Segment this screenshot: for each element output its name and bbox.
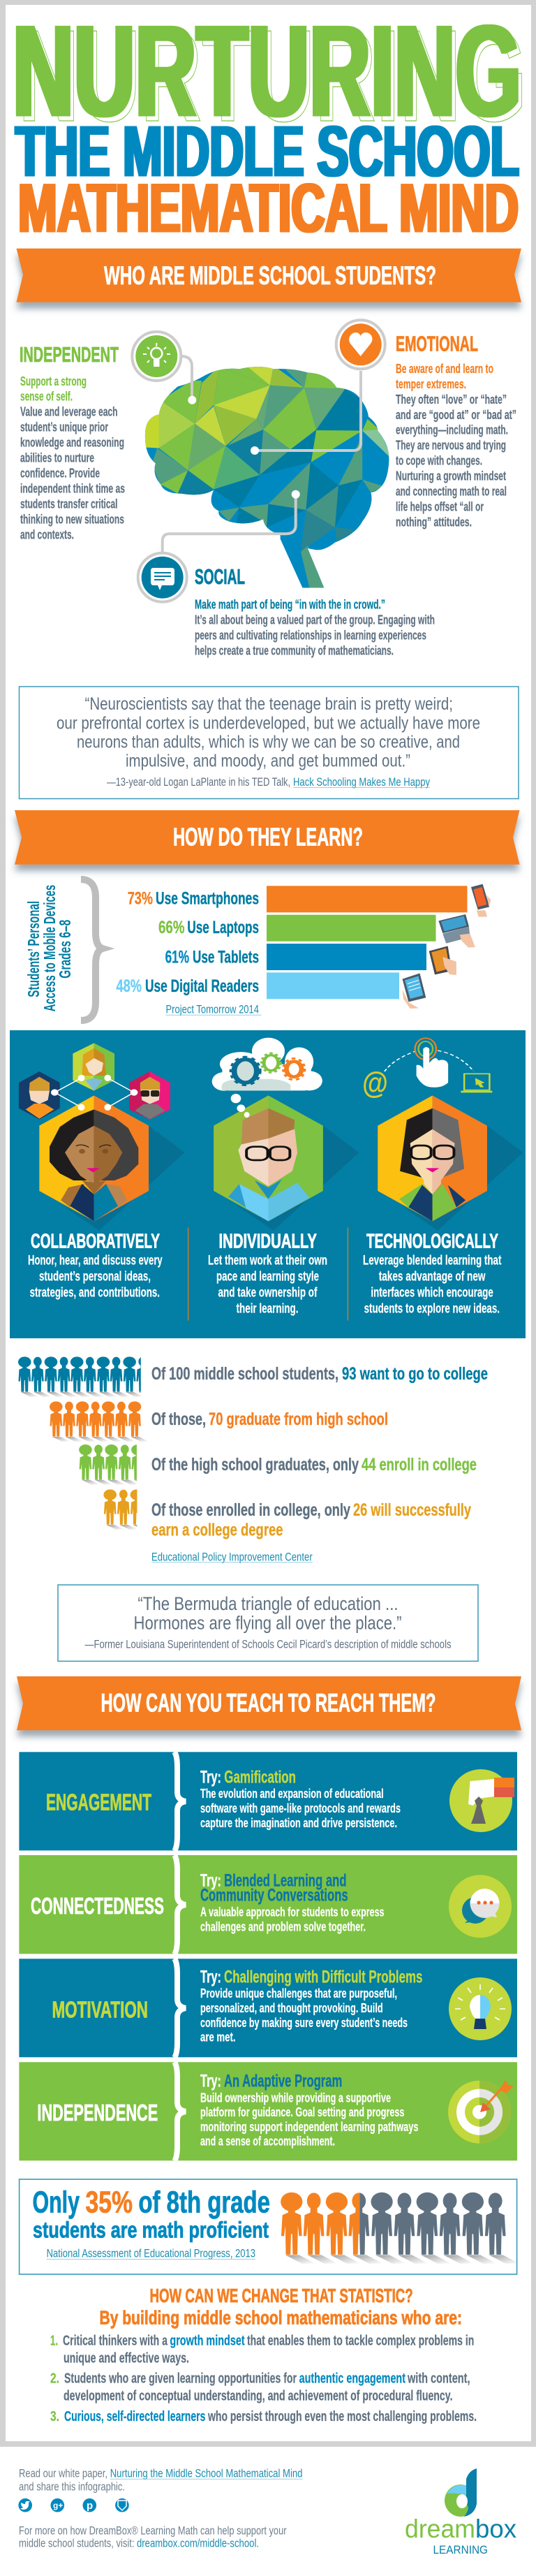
icon: digital reader: [402, 973, 426, 1009]
heading: how can we change that statistic: [99, 2285, 462, 2329]
text block: emotional: to cope with changes.: [396, 453, 482, 468]
rotated label: students personal access: Grades 6–8: [56, 920, 74, 979]
text block: independent: and contexts.: [20, 527, 74, 541]
connector: social: [163, 495, 296, 552]
card: connectedness: Try:: [200, 1871, 221, 1891]
list item 2: 2.: [50, 2371, 59, 2387]
stat line: 26 earn degree: 26 will successfully: [353, 1500, 471, 1520]
card: connectedness: [19, 1855, 517, 1954]
text block: independent: knowledge and reasoning: [20, 435, 124, 450]
rotated label: students personal access: Students’ Personal: [24, 901, 43, 997]
card: connectedness: Community Conversations: [200, 1886, 348, 1905]
rotated label: students personal access: Access to Mobile Devices: [40, 885, 59, 1011]
list item 2: Students who are given learning opportunities for: [64, 2371, 297, 2387]
icon: pinterest: [82, 2498, 96, 2512]
list item 1: 1.: [50, 2334, 58, 2349]
column: collaboratively: COLLABORATIVELY: [31, 1231, 160, 1253]
card: motivation: Challenging with Difficult Problems: [224, 1967, 422, 1986]
card: engagement: Gamification: [224, 1767, 296, 1787]
card: engagement: Try:: [200, 1767, 221, 1787]
card: independence: monitoring support independent learning pathways: [200, 2119, 419, 2134]
card: connectedness: A valuable approach for students to express: [200, 1904, 384, 1919]
footer: white paper text: [19, 2468, 303, 2494]
stat line: 70 graduate: [151, 1410, 388, 1429]
card: engagement: software with game-like protocols and rewards: [200, 1801, 401, 1815]
icon: thought cloud with gears: [212, 1038, 322, 1118]
bar: laptops: Use Laptops: [187, 918, 259, 937]
pictogram row: 44: [79, 1444, 137, 1485]
list item 1: Critical thinkers with a: [63, 2334, 168, 2349]
callout: neuroscientists quote: [20, 687, 519, 799]
list item 1: [50, 2334, 474, 2366]
card: motivation: Try:: [200, 1967, 221, 1986]
heading: how can we change that statistic: HOW CAN WE CHANGE THAT STATISTIC?: [149, 2285, 413, 2306]
column: collaboratively: Honor, hear, and discuss every: [28, 1253, 163, 1268]
connector dots: [188, 396, 300, 499]
connector: emotional: [255, 371, 361, 451]
callout: neuroscientists quote: impulsive, and moody, and get bummed out.”: [126, 751, 410, 770]
connector: independent: [181, 356, 192, 400]
portrait: technological student: [378, 1095, 487, 1221]
text block: independent: student’s unique prior: [20, 420, 108, 434]
list item 3: 3.: [50, 2409, 59, 2424]
logo wordmark: dream: [405, 2515, 475, 2543]
stat line: 70 graduate: Of those,: [151, 1410, 206, 1429]
text block: independent: sense of self.: [20, 389, 73, 404]
bar: digital readers: [116, 972, 399, 999]
pictogram row: 70: [50, 1401, 149, 1442]
bar: smartphones: [128, 886, 467, 912]
stat line: 93 want college: Of 100 middle school students,: [151, 1364, 338, 1384]
portrait: collaborative student: [39, 1095, 149, 1221]
bar: digital readers: Use Digital Readers: [145, 976, 259, 996]
bar chart: device access: [116, 886, 468, 999]
text block: emotional: nothing” attitudes.: [396, 514, 472, 529]
icon: twitter: [18, 2498, 32, 2512]
card: connectedness: CONNECTEDNESS: [31, 1893, 164, 1919]
column: technologically: [363, 1231, 502, 1316]
card: independence: platform for guidance. Goal setting and progress: [200, 2105, 404, 2119]
panel: 35 percent proficient: Only: [32, 2186, 80, 2220]
text block: social: [195, 597, 435, 657]
icon: pinterest: p: [87, 2500, 93, 2512]
list item 2: with content,: [407, 2371, 470, 2387]
icon: google plus: g+: [53, 2501, 63, 2510]
card: connectedness: challenges and problem solve together.: [200, 1919, 366, 1933]
column: collaboratively: [28, 1231, 163, 1300]
icon: chess move: [449, 1769, 514, 1832]
stat line: 93 want college: 93 want to go to college: [342, 1364, 488, 1384]
bar: laptops: [158, 915, 436, 942]
icon: shield: [115, 2498, 129, 2512]
card: engagement: [19, 1752, 517, 1851]
bar: smartphones: 73%: [128, 888, 153, 908]
callout: bermuda triangle quote: Hormones are flying all over the place.”: [134, 1612, 402, 1633]
stat line: 26 earn degree: Of those enrolled in college, only: [151, 1500, 350, 1520]
text block: independent: confidence. Provide: [20, 466, 100, 481]
bar: tablets: 61%: [165, 947, 189, 967]
card: engagement: ENGAGEMENT: [46, 1790, 151, 1815]
icon: at sign: @: [362, 1066, 388, 1100]
banner: how do they learn: [15, 810, 519, 865]
card: motivation: confidence by making sure every student’s needs: [200, 2015, 408, 2030]
footer: white paper text: Read our white paper,: [19, 2468, 107, 2480]
card: motivation: [19, 1959, 517, 2058]
icon: light bulb: [132, 332, 181, 381]
panel: 35 percent proficient: students are math proficient: [33, 2217, 269, 2242]
stat line: 70 graduate: 70 graduate from high school: [209, 1410, 388, 1429]
pictogram row: 26: [103, 1489, 137, 1530]
text block: independent: abilities to nurture: [20, 451, 94, 465]
banner: who are middle school students: [17, 249, 521, 302]
source: educational policy improvement center: Educational Policy Improvement Center: [151, 1551, 313, 1563]
list item 3: [50, 2409, 477, 2424]
brain illustration: [137, 363, 396, 592]
callout: bermuda triangle quote: “The Bermuda triangle of education ...: [137, 1593, 399, 1614]
icons: devices: [402, 884, 491, 1009]
footer: more information text: [19, 2524, 287, 2550]
logo mark: [445, 2468, 477, 2517]
heading: social: SOCIAL: [195, 565, 245, 589]
list item 2: authentic engagement: [299, 2371, 405, 2387]
card: independence: An Adaptive Program: [224, 2072, 342, 2091]
panel: 35 percent proficient: [20, 2179, 519, 2274]
bar: digital readers: 48%: [116, 976, 142, 996]
callout: neuroscientists quote: —13-year-old Logan LaPlante in his TED Talk,: [107, 776, 290, 789]
icon: tablet: [429, 946, 456, 975]
text block: emotional: temper extremes.: [396, 376, 466, 391]
text block: independent: Support a strong: [20, 374, 87, 388]
logo: dreambox learning: box: [475, 2515, 516, 2543]
portrait: individual student: [214, 1095, 323, 1221]
text block: emotional: life helps offset “all or: [396, 499, 484, 513]
panel: 35 percent proficient: 35%: [85, 2186, 133, 2220]
footer: more information text: dreambox.com/middle-school.: [137, 2538, 259, 2550]
card: engagement: capture the imagination and drive persistence.: [200, 1815, 397, 1830]
column: individually: INDIVIDUALLY: [219, 1231, 317, 1253]
connector network: [51, 1075, 137, 1111]
column: technologically: takes advantage of new: [379, 1268, 486, 1284]
icon: bright bulb: [449, 1977, 512, 2040]
heading: emotional: EMOTIONAL: [396, 332, 478, 356]
callout: bermuda triangle quote: —Former Louisiana Superintendent of Schools Cecil Picard’s description of middle schools: [85, 1638, 451, 1651]
column: individually: pace and learning style: [216, 1268, 319, 1284]
bar: laptops: 66%: [158, 918, 184, 937]
logo: dreambox learning: LEARNING: [433, 2543, 488, 2556]
source: project tomorrow: Project Tomorrow 2014: [166, 1004, 259, 1016]
column: individually: and take ownership of: [218, 1285, 318, 1300]
stat line: 26 earn degree: earn a college degree: [151, 1520, 283, 1539]
card: independence: Try:: [200, 2072, 221, 2091]
list item 1: growth mindset: [170, 2334, 245, 2349]
heading: independent: INDEPENDENT: [20, 343, 119, 367]
card: connectedness: Blended Learning and: [224, 1871, 347, 1891]
text block: independent: [20, 374, 125, 541]
callout: neuroscientists quote: Hack Schooling Makes Me Happy: [293, 776, 431, 789]
pictogram row: 93: [18, 1356, 141, 1397]
portrait: top small hexagon: [73, 1043, 114, 1091]
dividers: [188, 1227, 348, 1321]
stat line: 26 earn degree: [151, 1500, 471, 1539]
column: collaboratively: student’s personal ideas,: [39, 1268, 151, 1284]
callout: neuroscientists quote: “Neuroscientists say that the teenage brain is pretty weird;: [85, 694, 453, 714]
text block: independent: Value and leverage each: [20, 404, 117, 419]
card: motivation: Provide unique challenges that are purposeful,: [200, 1986, 397, 2000]
icon: touch hand and laptop: [385, 1038, 492, 1092]
social icons: [18, 2498, 129, 2512]
list item 1: unique and effective ways.: [64, 2351, 189, 2366]
bar: tablets: Use Tablets: [193, 947, 259, 967]
card: motivation: are met.: [200, 2030, 236, 2044]
card: independence: Build ownership while providing a supportive: [200, 2090, 391, 2105]
column: individually: Let them work at their own: [208, 1253, 327, 1268]
footer: white paper text: and share this infographic.: [19, 2481, 125, 2494]
card: independence: and a sense of accomplishment.: [200, 2134, 335, 2149]
card: motivation: MOTIVATION: [52, 1996, 148, 2022]
icon: speech bubbles: [449, 1875, 512, 1938]
title: [13, 0, 527, 247]
footer: more information text: For more on how DreamBox® Learning Math can help support your: [19, 2524, 287, 2537]
text block: independent: independent think time as: [20, 481, 125, 496]
stat line: 44 enroll: Of the high school graduates, only: [151, 1455, 359, 1474]
text block: independent: students transfer critical: [20, 497, 117, 511]
text block: emotional: [396, 361, 516, 529]
icon: heart: [336, 320, 385, 369]
logo: dreambox learning: [405, 2468, 516, 2556]
callout: neuroscientists quote: neurons than adults, which is why we can be so creative, and: [77, 732, 460, 752]
column: individually: [208, 1231, 327, 1316]
panel: how they learn: [10, 1030, 526, 1338]
stat line: 44 enroll: 44 enroll in college: [362, 1455, 477, 1474]
footer: more information text: middle school students, visit:: [19, 2538, 134, 2550]
banner: how do they learn: HOW DO THEY LEARN?: [173, 823, 363, 851]
portrait: left small hexagon: [19, 1071, 60, 1120]
card: engagement: The evolution and expansion of educational: [200, 1786, 384, 1801]
portrait: right small hexagon: [129, 1071, 170, 1120]
callout: bermuda triangle quote: [58, 1585, 478, 1661]
rotated label: students personal access: [24, 885, 74, 1011]
list: mathematician traits: [50, 2334, 477, 2424]
card: independence: [19, 2062, 517, 2161]
banner: how can you teach: [17, 1676, 521, 1730]
column: individually: their learning.: [236, 1301, 299, 1316]
pictogram: ten students: [281, 2193, 519, 2264]
hexagon shadows: [61, 1126, 523, 1231]
card: motivation: personalized, and thought provoking. Build: [200, 2000, 383, 2015]
pictograms: college funnel: [18, 1356, 157, 1530]
text block: independent: thinking to new situations: [20, 512, 124, 527]
card: independence: INDEPENDENCE: [37, 2100, 158, 2125]
icon: laptop: [438, 914, 475, 948]
text block: social: Make math part of being “in with the in crowd.”: [195, 597, 385, 611]
bar: tablets: [165, 944, 426, 970]
list item 3: Curious, self-directed learners: [64, 2409, 205, 2424]
column: collaboratively: strategies, and contributions.: [30, 1285, 160, 1300]
bar: smartphones: Use Smartphones: [156, 888, 259, 908]
icon: target: [448, 2080, 514, 2144]
panel: 35 percent proficient: National Assessment of Educational Progress, 2013: [47, 2247, 255, 2260]
list item 2: [50, 2371, 470, 2404]
footer: white paper text: Nurturing the Middle School Mathematical Mind: [110, 2468, 302, 2480]
icon: speech bubble: [138, 553, 187, 602]
icon: google plus: [50, 2498, 64, 2512]
panel: 35 percent proficient: of 8th grade: [138, 2186, 270, 2220]
icon: smartphone: [471, 884, 491, 917]
text block: social: helps create a true community of mathematicians.: [195, 643, 394, 657]
brace: [81, 879, 103, 1020]
